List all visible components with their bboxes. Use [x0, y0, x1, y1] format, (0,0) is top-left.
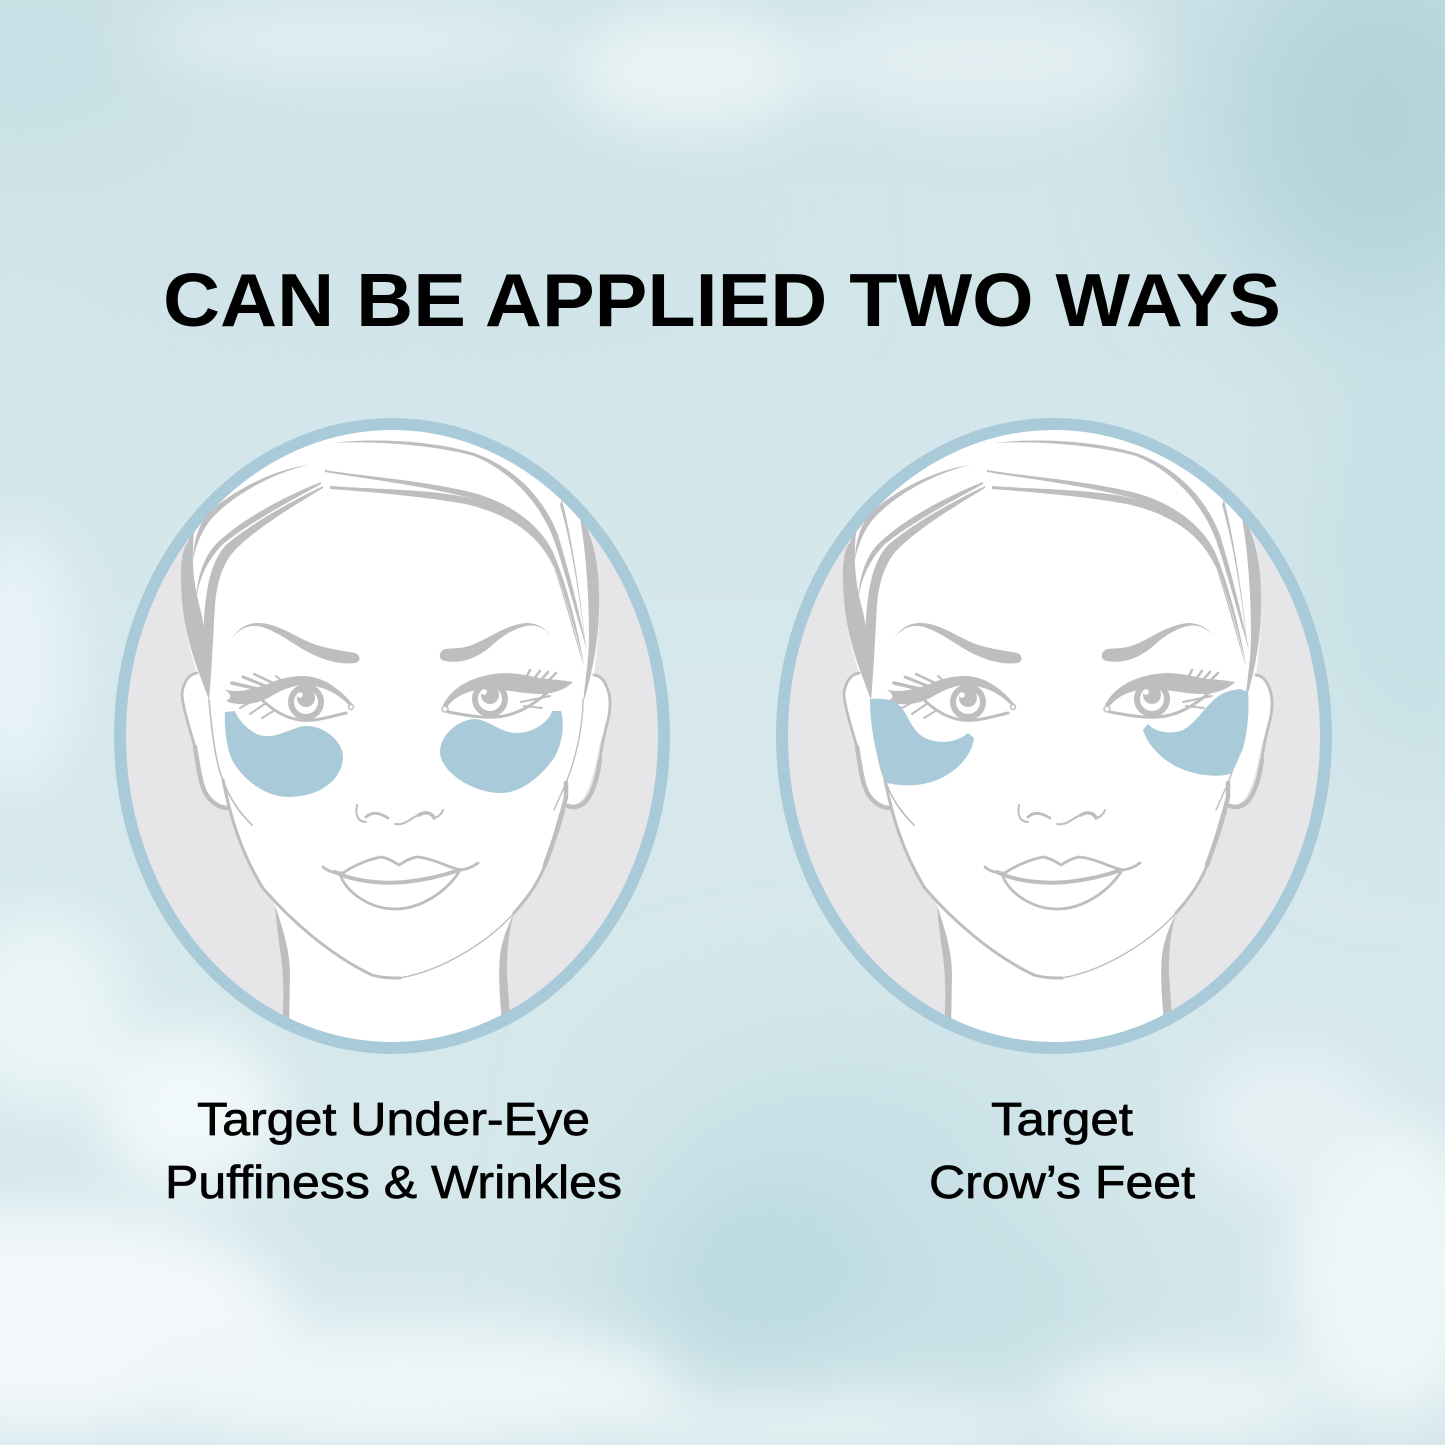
patch: right under-eye	[440, 711, 563, 793]
oval frame: right	[782, 424, 1326, 1048]
caption: crow's feet: Target	[991, 1093, 1133, 1145]
nose	[356, 805, 443, 824]
title: CAN BE APPLIED TWO WAYS	[163, 258, 1281, 342]
eye patches: crow's feet	[870, 689, 1249, 785]
neck lines	[275, 905, 514, 1030]
oval frame: left	[120, 424, 664, 1048]
patch: left crow's feet	[870, 699, 974, 785]
eye patches: under-eye	[225, 711, 563, 797]
eyebrows	[232, 623, 552, 663]
oval backdrop	[120, 424, 664, 1048]
caption: crow's feet	[929, 1093, 1195, 1208]
illustration: right face, crow's feet placement	[782, 400, 1326, 1060]
caption: under-eye	[165, 1093, 622, 1208]
caption: crow's feet: Crow’s Feet	[929, 1156, 1195, 1208]
lips	[323, 857, 478, 909]
face silhouette	[182, 400, 610, 1060]
hair strands	[181, 440, 599, 704]
patch: left under-eye	[225, 711, 343, 797]
ear and jaw outlines	[182, 673, 610, 978]
right eye	[442, 670, 573, 717]
caption: under-eye: Target Under-Eye	[197, 1093, 590, 1145]
patch: right crow's feet	[1143, 689, 1249, 776]
illustration: left face, under-eye placement	[120, 400, 664, 1060]
caption: under-eye: Puffiness & Wrinkles	[165, 1156, 622, 1208]
left eye	[224, 674, 354, 720]
